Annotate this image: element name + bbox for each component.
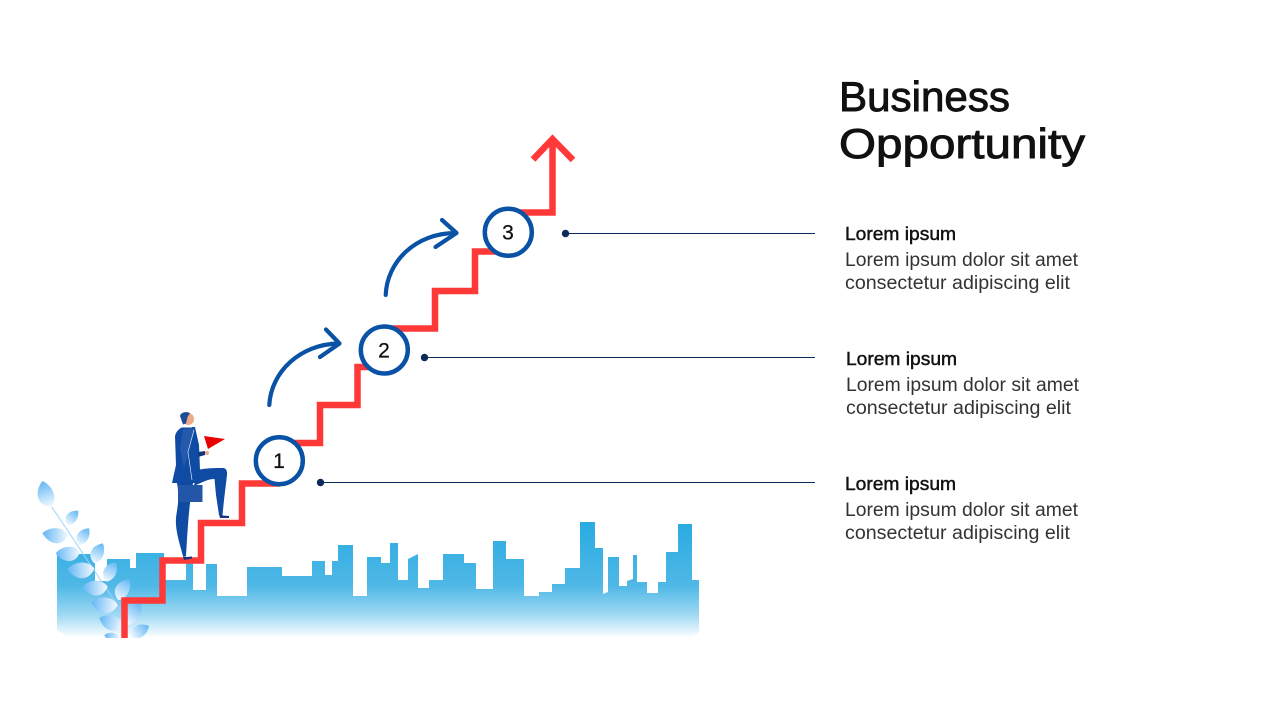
- step marker 1: 1: [273, 450, 285, 473]
- shoes: [183, 514, 229, 560]
- text block 2: Lorem ipsum dolor sit amet: [846, 375, 1080, 396]
- arm: [198, 451, 205, 457]
- progress arrow 2: [386, 220, 456, 295]
- progress arrow 1: [269, 330, 340, 405]
- text block 3: Lorem ipsum: [845, 224, 956, 244]
- raised leg: [194, 468, 227, 515]
- back leg: [176, 483, 193, 556]
- step marker 3: [485, 209, 532, 256]
- hand: [205, 451, 209, 455]
- text block 2: consectetur adipiscing elit: [846, 398, 1072, 419]
- text block 3: consectetur adipiscing elit: [845, 273, 1071, 294]
- leader line 2: [421, 354, 815, 361]
- hair: [180, 412, 190, 424]
- step marker 2: [361, 326, 408, 374]
- title: [839, 73, 1085, 167]
- leader line 1: [317, 479, 815, 486]
- collar: [182, 426, 192, 428]
- step marker 1: [256, 437, 303, 484]
- skyline: [57, 522, 699, 637]
- text block 1: [845, 474, 1079, 544]
- head: [183, 413, 194, 425]
- text block 3: Lorem ipsum dolor sit amet: [845, 250, 1079, 271]
- plant: [38, 481, 149, 638]
- text block 1: Lorem ipsum dolor sit amet: [845, 500, 1079, 521]
- flag: [204, 436, 225, 449]
- coat: [172, 427, 201, 483]
- step marker 3: 3: [502, 222, 514, 244]
- businessman: [172, 412, 229, 560]
- briefcase: [178, 485, 202, 502]
- text block 2: Lorem ipsum: [846, 349, 957, 369]
- text block 2: [846, 349, 1080, 419]
- title: Business: [839, 73, 1010, 120]
- coat highlight: [180, 428, 195, 468]
- text block 1: consectetur adipiscing elit: [845, 523, 1071, 544]
- title: Opportunity: [839, 120, 1085, 167]
- text block 3: [845, 224, 1079, 294]
- leader line 3: [562, 230, 815, 237]
- text block 1: Lorem ipsum: [845, 474, 956, 494]
- step marker 2: 2: [378, 340, 390, 362]
- red stair arrow: [124, 139, 573, 638]
